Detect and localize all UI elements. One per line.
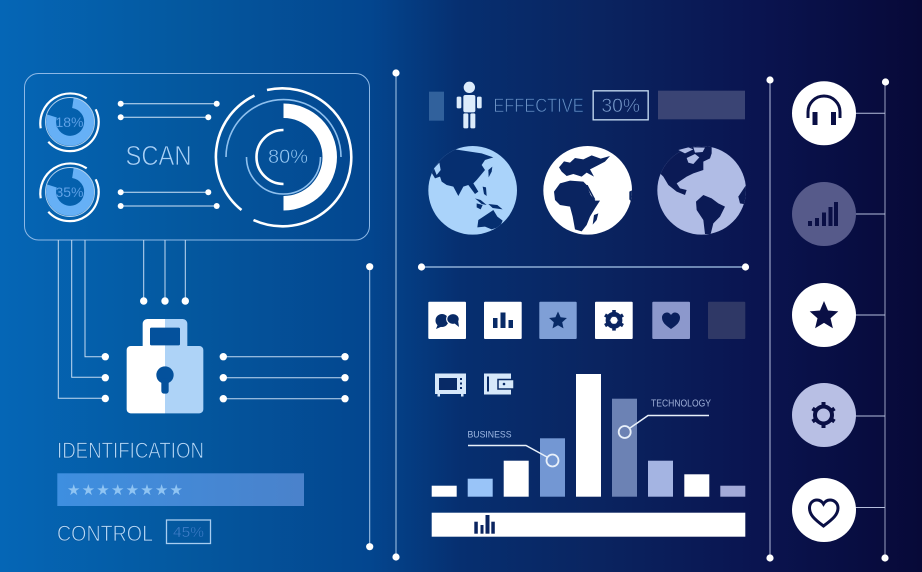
gauge: 35% <box>40 163 99 221</box>
callout: technology: TECHNOLOGY <box>651 398 711 410</box>
vertical rule: right <box>766 76 774 562</box>
globe: americas <box>653 143 748 235</box>
tile: bars <box>484 302 522 339</box>
gauge: 35%: 35% <box>55 184 84 200</box>
icon: wallet <box>484 374 514 394</box>
connector lines: lower <box>118 189 220 209</box>
tile: heart <box>652 302 690 339</box>
icon tile row <box>428 302 745 339</box>
icon: star <box>792 283 885 347</box>
tile: chat <box>428 302 466 339</box>
icon: gear <box>792 383 885 447</box>
callout: business <box>468 430 558 466</box>
bar chart <box>432 374 745 497</box>
badge: 30% <box>593 91 648 120</box>
heading: scan: SCAN <box>126 140 192 171</box>
gauge: 18% <box>40 93 99 151</box>
vertical rule: far right <box>881 78 889 562</box>
effective header row <box>429 82 745 128</box>
badge: 45% <box>166 520 210 544</box>
globes <box>428 146 746 235</box>
icon: microwave <box>435 374 466 396</box>
badge: 45%: 45% <box>173 524 204 541</box>
footer bar with mini chart <box>432 513 745 537</box>
password bar: ★★★★★★★★ <box>67 482 183 499</box>
gauge: 18%: 18% <box>55 114 84 130</box>
connector lines: upper <box>118 101 220 120</box>
vertical rule: centre left <box>392 69 400 561</box>
icon: heart <box>792 478 885 542</box>
label: control: CONTROL <box>57 521 153 546</box>
horizontal rule <box>418 263 749 271</box>
globe: asia <box>428 146 517 235</box>
icon: headphones <box>792 81 885 145</box>
circuit lines: panel to lock <box>58 240 189 402</box>
heading: identification: IDENTIFICATION <box>57 438 204 463</box>
icon: padlock <box>127 319 203 413</box>
vertical rule: left <box>366 263 373 550</box>
circuit lines: lock right <box>220 353 349 402</box>
callout: business: BUSINESS <box>468 430 512 440</box>
icon: person <box>457 82 482 128</box>
right bar <box>658 91 745 119</box>
tile: gear <box>595 302 633 339</box>
gauge: 80%: 80% <box>268 147 308 168</box>
panel: scan <box>24 74 370 240</box>
gauge: 80% <box>216 88 351 226</box>
badge: 30%: 30% <box>601 96 640 117</box>
globe: africa and europe <box>543 146 633 235</box>
password bar <box>57 473 304 506</box>
tile: blank <box>708 302 745 339</box>
callout: technology <box>619 398 711 438</box>
left bar <box>429 92 444 121</box>
label: effective: EFFECTIVE <box>493 96 584 117</box>
icon: signal <box>792 182 885 246</box>
tile: star <box>539 302 577 339</box>
